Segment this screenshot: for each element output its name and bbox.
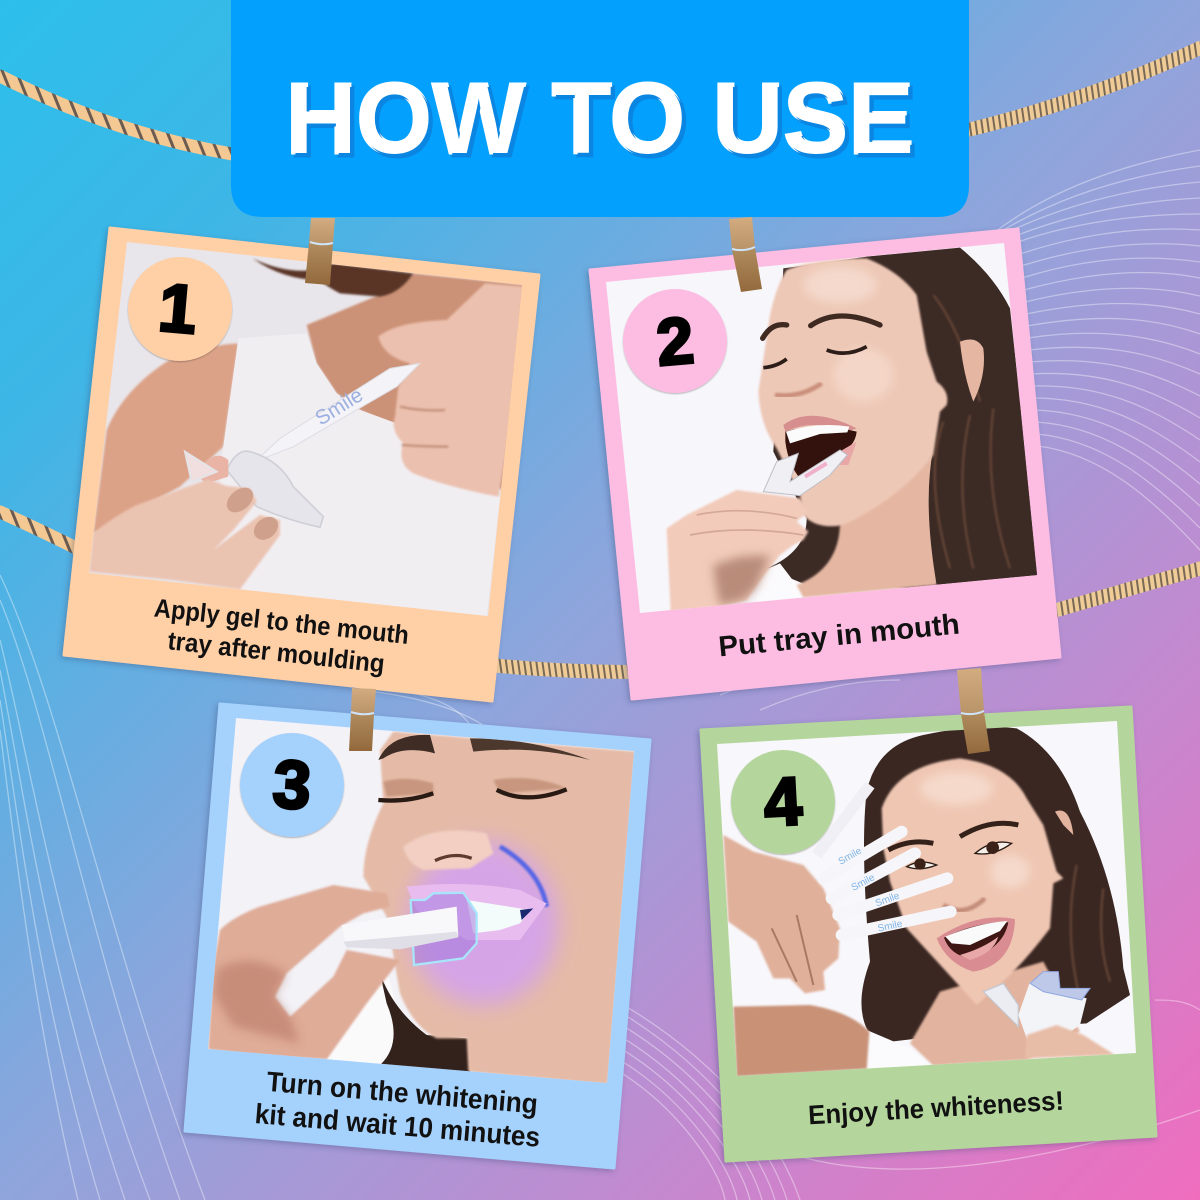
caption 2: Put tray in mouth <box>717 608 961 664</box>
panel: step 3 <box>185 704 650 1168</box>
number badge 4: 4 <box>762 763 804 841</box>
photo: tray into mouth <box>606 243 1037 613</box>
title banner <box>231 0 969 217</box>
number badge 4 <box>731 750 835 854</box>
clothespin 4 <box>957 668 990 754</box>
rope: middle left <box>0 511 80 550</box>
rope: top right <box>968 47 1200 130</box>
number badge 3: 3 <box>270 746 314 824</box>
rope: middle right <box>1050 568 1200 612</box>
photo: applying gel to tray <box>89 242 522 616</box>
title: HOW TO USE <box>286 63 914 175</box>
photo: applying gel to tray: Smile <box>311 383 367 430</box>
number badge 2: 2 <box>653 303 697 379</box>
panel: step 2 <box>590 229 1060 699</box>
photo: enjoying whiteness: Smile <box>850 872 877 894</box>
caption 4: Enjoy the whiteness! <box>807 1086 1065 1130</box>
number badge 2 <box>623 289 727 393</box>
number badge 1: 1 <box>156 269 200 348</box>
photo: enjoying whiteness <box>717 721 1136 1076</box>
caption 1: tray after moulding <box>166 625 386 679</box>
caption 3 <box>254 1065 544 1153</box>
number badge 1 <box>128 257 232 361</box>
rope: top left <box>0 75 232 154</box>
clothespin 2 <box>729 217 762 292</box>
clothespin 1 <box>305 218 335 285</box>
caption 3: kit and wait 10 minutes <box>254 1098 541 1153</box>
photo: whitening light <box>208 718 634 1083</box>
caption 3: Turn on the whitening <box>265 1066 539 1120</box>
rope: middle <box>490 665 640 672</box>
photo: enjoying whiteness: Smile <box>877 919 904 935</box>
caption 1: Apply gel to the mouth <box>153 593 410 650</box>
photo: enjoying whiteness: Smile <box>874 890 902 909</box>
panel: step 4 <box>701 707 1160 1161</box>
panel: step 1 <box>64 228 539 701</box>
clothespin 3 <box>349 688 376 751</box>
number badge 3 <box>240 733 344 837</box>
caption 1 <box>149 593 410 681</box>
photo: enjoying whiteness: Smile <box>837 845 864 868</box>
